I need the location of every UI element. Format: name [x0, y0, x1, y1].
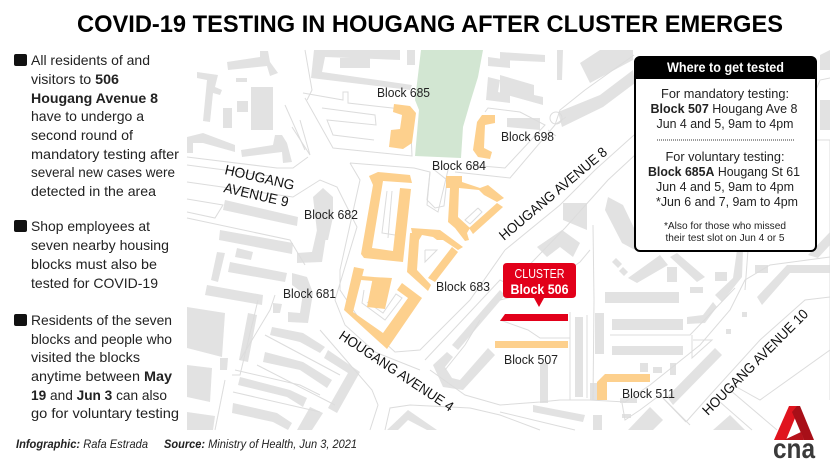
- bullet 3: 19 and Jun 3 can also: [31, 387, 167, 403]
- bullet 3: go for voluntary testing: [31, 405, 179, 421]
- map: [187, 50, 830, 430]
- panel: where to get tested: [635, 57, 816, 251]
- bullet list: [14, 52, 179, 421]
- bullet 1: All residents of and: [31, 52, 150, 68]
- bullet 1: several new cases were: [31, 164, 175, 180]
- block labels: Block 682: [304, 207, 358, 222]
- bullet 2: seven nearby housing: [31, 237, 169, 253]
- road names: HOUGANG: [223, 161, 296, 193]
- bullet 3: visited the blocks: [31, 349, 140, 365]
- callout: cluster block 506: CLUSTER: [514, 266, 564, 281]
- bullet 3: Residents of the seven: [31, 312, 172, 328]
- block 507: [495, 341, 568, 348]
- voluntary testing text: [648, 149, 800, 209]
- mandatory testing text: Jun 4 and 5, 9am to 4pm: [656, 116, 794, 131]
- logo: cna: cna: [773, 433, 815, 464]
- mandatory testing text: Block 507 Hougang Ave 8: [650, 101, 798, 116]
- block 511: [597, 374, 650, 400]
- footnote: their test slot on Jun 4 or 5: [666, 232, 785, 244]
- panel header: [635, 57, 816, 79]
- block labels: Block 681: [283, 286, 336, 301]
- bullet 3: [14, 312, 179, 421]
- voluntary testing text: Block 685A Hougang St 61: [648, 164, 800, 179]
- credits: Source: Ministry of Health, Jun 3, 2021: [164, 437, 357, 451]
- footnote: [664, 220, 786, 244]
- bullet 1: second round of: [31, 127, 133, 143]
- block labels: Block 507: [504, 352, 558, 367]
- logo: cna: [773, 406, 815, 464]
- bullet 2: Shop employees at: [31, 218, 150, 234]
- callout: cluster block 506: [503, 263, 576, 307]
- bullet 1: visitors to 506: [31, 71, 119, 87]
- bullet 1: [14, 52, 179, 199]
- voluntary testing text: Jun 4 and 5, 9am to 4pm: [656, 179, 794, 194]
- bullet 1: detected in the area: [31, 183, 156, 199]
- block 682: [361, 172, 412, 262]
- highlighted blocks: [344, 104, 650, 400]
- park: [415, 50, 483, 158]
- road names: HOUGANG AVENUE 8: [496, 143, 610, 243]
- bullet 2: [14, 218, 169, 291]
- credits: Infographic: Rafa Estrada: [16, 437, 148, 451]
- surrounding buildings: [187, 50, 830, 430]
- road outlines: [187, 50, 830, 430]
- road names: HOUGANG AVENUE 10: [699, 306, 811, 418]
- block labels: Block 683: [436, 279, 490, 294]
- bullet 2: blocks must also be: [31, 256, 157, 272]
- bullet 1: mandatory testing after: [31, 146, 179, 162]
- bullet 1: Hougang Avenue 8: [31, 90, 158, 106]
- credits: [16, 437, 357, 451]
- block labels: [283, 85, 675, 401]
- block 698: [473, 115, 495, 159]
- panel: where to get tested: Where to get tested: [667, 60, 784, 75]
- block labels: Block 684: [432, 158, 486, 173]
- block labels: Block 511: [622, 386, 675, 401]
- title: COVID-19 TESTING IN HOUGANG AFTER CLUSTER EMERGES: [77, 11, 783, 38]
- block 683: [407, 228, 463, 291]
- block 684: [446, 176, 504, 241]
- voluntary testing text: *Jun 6 and 7, 9am to 4pm: [656, 194, 798, 209]
- callout: cluster block 506: Block 506: [510, 282, 569, 297]
- road names: [222, 143, 811, 418]
- voluntary testing text: For voluntary testing:: [666, 149, 784, 164]
- bullet 3: anytime between May: [31, 368, 172, 384]
- bullet 3: blocks and people who: [31, 331, 172, 347]
- block labels: Block 685: [377, 85, 430, 100]
- bullet 2: tested for COVID-19: [31, 275, 158, 291]
- block labels: Block 698: [501, 129, 554, 144]
- bullet 1: have to undergo a: [31, 108, 144, 124]
- block 681: [344, 267, 422, 349]
- block 506 highlighted in red: [500, 314, 568, 321]
- mandatory testing text: [650, 86, 798, 131]
- footnote: *Also for those who missed: [664, 220, 786, 232]
- mandatory testing text: For mandatory testing:: [661, 86, 789, 101]
- road names: HOUGANG AVENUE 4: [336, 327, 457, 415]
- block 685: [389, 104, 416, 149]
- road names: AVENUE 9: [222, 179, 290, 210]
